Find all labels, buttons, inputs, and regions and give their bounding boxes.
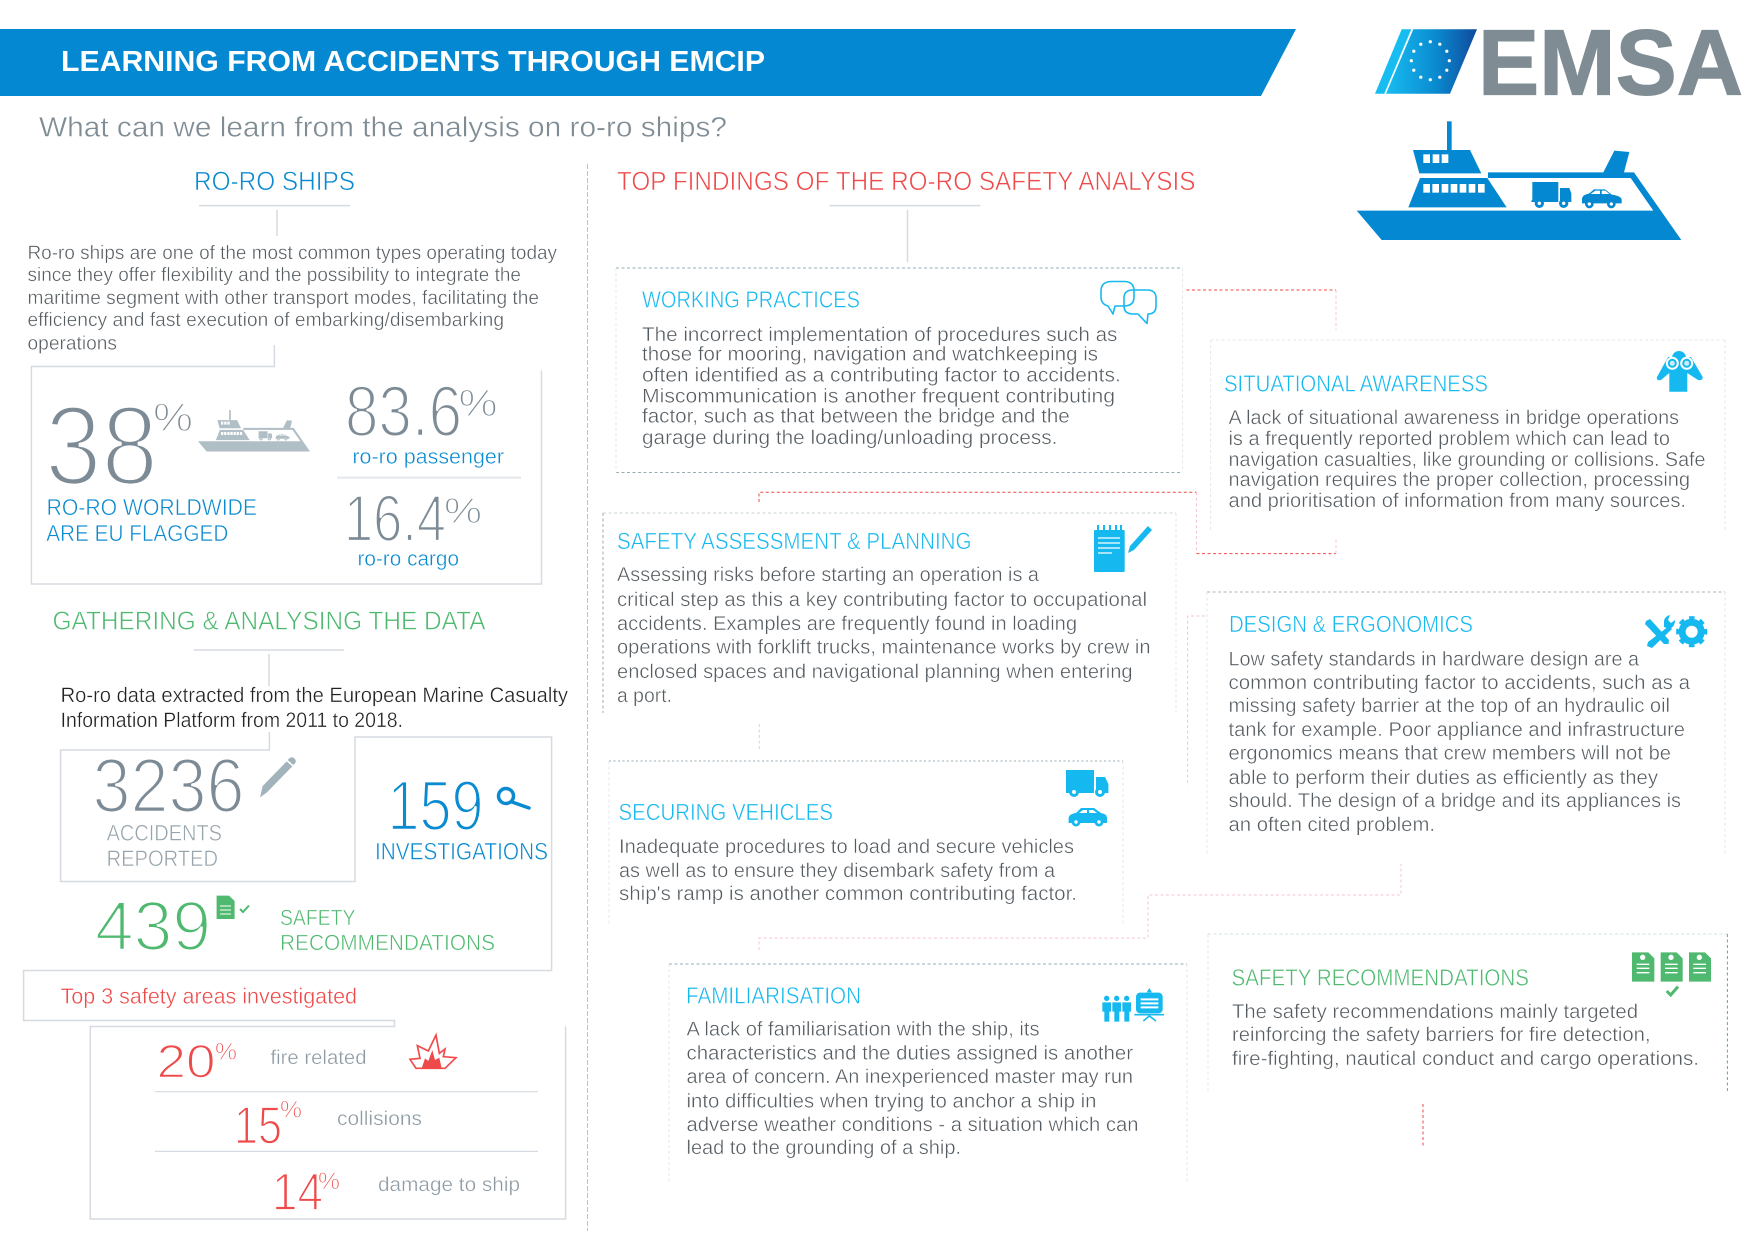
heading: top 3: Top 3 safety areas investigated [61,984,357,1008]
text block: situational awareness: A lack of situational awareness in bridge operations [1228,407,1679,429]
icon: documents with check [1632,952,1711,995]
text block: situational awareness: and prioritisation of information from many sources. [1228,490,1686,512]
text block: ro-ro description: operations [28,332,117,354]
text block: working practices: often identified as a contributing factor to accidents. [642,365,1121,387]
text block: situational awareness: navigation requires the proper collection, processing [1228,469,1690,491]
stat: 439 safety recommendations: 439 [95,887,211,965]
stat: 38% EU flagged: ARE EU FLAGGED [46,520,228,546]
panel: securing vehicles [609,761,1123,924]
stat: 20% fire related [156,1034,366,1088]
text block: familiarisation: characteristics and the duties assigned is another [686,1043,1133,1065]
text block: ro-ro description: since they offer flexibility and the possibility to integrate the [28,264,521,286]
panel: top 3 safety areas [61,984,538,1222]
text block: safety assessment: operations with forklift trucks, maintenance works by crew in [617,637,1150,659]
icon: crew and board [1102,988,1164,1022]
icon: truck [1066,770,1108,797]
text block: safety recommendations: reinforcing the safety barriers for fire detection, [1232,1024,1650,1046]
text block: safety assessment: a port. [617,685,672,707]
text block: working practices: The incorrect implementation of procedures such as [642,324,1117,346]
text block: ro-ro description: maritime segment with other transport modes, facilitating the [28,287,539,309]
text block: safety recommendations: fire-fighting, nautical conduct and cargo operations. [1232,1048,1699,1070]
icon: pencil [260,757,296,797]
text block: familiarisation: into difficulties when trying to anchor a ship in [686,1090,1096,1112]
text block: safety assessment: critical step as this a key contributing factor to occupational [617,589,1147,611]
text block: working practices: factor, such as that between the bridge and the [642,406,1070,428]
panel: safety assessment and planning [603,513,1176,713]
stat: 159 investigations [375,767,548,866]
connector: recommendations tail [1422,1104,1424,1147]
text block: safety assessment: accidents. Examples are frequently found in loading [617,613,1077,635]
text block: familiarisation [686,1019,1138,1159]
title: LEARNING FROM ACCIDENTS THROUGH EMCIP [61,46,765,78]
stat: 439 safety recommendations: RECOMMENDATIONS [280,930,495,955]
text block: design and ergonomics: able to perform their duties as efficiently as they [1228,767,1658,789]
text block: securing vehicles: as well as to ensure they disembark safety from a [619,860,1056,882]
stat: 16.4% ro-ro cargo: % [444,490,482,531]
text block: familiarisation: adverse weather conditions - a situation which can [686,1114,1138,1136]
text block: ro-ro description: efficiency and fast execution of embarking/disembarking [28,309,504,331]
text block: safety assessment [617,564,1150,707]
title banner [0,29,1296,96]
column divider [586,164,588,1231]
heading: gathering: GATHERING & ANALYSING THE DATA [52,606,486,636]
stat: 3236 accidents reported: REPORTED [107,846,218,871]
stat: 83.6% ro-ro passenger: % [458,383,498,425]
stat: 159 investigations: 159 [388,767,484,846]
text block: working practices: Miscommunication is another frequent contributing [642,386,1115,408]
panel: ro-ro ships [28,166,557,584]
connector: safety assessment to situational awareness [759,492,1336,554]
icon: tools and gear [1645,615,1705,648]
stat: 439 safety recommendations: SAFETY [280,905,356,930]
heading: familiarisation: FAMILIARISATION [686,982,861,1008]
text block: design and ergonomics: tank for example. Poor appliance and infrastructure [1228,719,1685,741]
text block: situational awareness: is a frequently reported problem which can lead to [1228,428,1670,450]
stat: 15% collisions: 15 [234,1096,282,1156]
stat: 14% damage to ship: damage to ship [378,1174,520,1196]
text block: situational awareness: navigation casualties, like grounding or collisions. Safe [1228,449,1706,471]
text block: familiarisation: area of concern. An inexperienced master may run [686,1066,1133,1088]
text block: safety assessment: Assessing risks before starting an operation is a [617,564,1040,586]
stat: 20% fire related: fire related [270,1047,366,1069]
stat: 3236 accidents reported: ACCIDENTS [107,821,222,846]
text block: working practices [642,324,1121,449]
heading: situational awareness: SITUATIONAL AWARENESS [1224,370,1488,396]
panel: situational awareness [1211,340,1725,531]
text block: safety recommendations [1232,1001,1699,1070]
text block: securing vehicles [619,836,1077,905]
stat: 38% EU flagged: RO-RO WORLDWIDE [47,494,257,520]
stat: 20% fire related: 20 [156,1034,216,1088]
stat: 83.6% ro-ro passenger: ro-ro passenger [352,445,504,468]
stat: 3236 accidents reported: 3236 [92,743,244,829]
text block: design and ergonomics: an often cited problem. [1228,814,1435,836]
text block: design and ergonomics: Low safety standards in hardware design are a [1228,648,1640,670]
stat: 38% EU flagged: 38 [45,382,158,508]
panel: familiarisation [669,964,1187,1184]
icon: person with binoculars [1657,351,1703,392]
text block: familiarisation: lead to the grounding of a ship. [686,1137,961,1159]
stat: 15% collisions [234,1096,422,1156]
heading: safety assessment: SAFETY ASSESSMENT & PLANNING [617,528,972,554]
subtitle: What can we learn from the analysis on ro-ro ships? [39,112,727,142]
text block: securing vehicles: Inadequate procedures to load and secure vehicles [619,836,1074,858]
stat: 14% damage to ship: % [318,1168,340,1195]
heading: ro-ro ships: RO-RO SHIPS [194,166,355,196]
stat: 14% damage to ship: 14 [272,1163,323,1222]
heading: top findings: TOP FINDINGS OF THE RO-RO SAFETY ANALYSIS [617,166,1195,196]
icon: magnifier [498,788,529,808]
text block: design and ergonomics: ergonomics means that crew members will not be [1228,743,1671,765]
connector: safety assessment to design and ergonomics [1188,616,1205,786]
icon: fire [410,1035,456,1068]
stat: 439 safety recommendations [95,887,495,965]
stat: 15% collisions: % [280,1096,302,1123]
text block: safety assessment: enclosed spaces and navigational planning when entering [617,661,1133,683]
stat: 14% damage to ship [272,1163,520,1222]
text block: data source: Information Platform from 2011 to 2018. [61,709,403,732]
icon: ro-ro ship [1357,121,1681,240]
stat: 3236 accidents reported [92,743,244,871]
connector: securing vehicles to familiarisation and design [759,864,1401,950]
text block: safety recommendations: The safety recommendations mainly targeted [1232,1001,1638,1023]
stat: 20% fire related: % [215,1039,237,1066]
heading: working practices: WORKING PRACTICES [642,287,860,313]
text block: working practices: those for mooring, navigation and watchkeeping is [642,344,1098,366]
stat: 38% EU flagged [45,382,257,546]
text block: working practices: garage during the loading/unloading process. [642,427,1057,449]
text block: familiarisation: A lack of familiarisation with the ship, its [686,1019,1040,1041]
text block: data source: Ro-ro data extracted from the European Marine Casualty [61,684,568,707]
connector: working practices to situational awareness [1186,290,1336,330]
stat: 16.4% ro-ro cargo: ro-ro cargo [358,548,459,570]
text block: design and ergonomics [1228,648,1691,836]
text block: ro-ro description: Ro-ro ships are one of the most common types operating today [28,242,557,264]
panel: gathering and analysing the data [24,606,568,1219]
panel: design and ergonomics [1207,592,1725,855]
stat: 16.4% ro-ro cargo: 16.4 [344,481,446,555]
icon: small ship [198,410,310,452]
stat: 159 investigations: INVESTIGATIONS [375,839,548,866]
text block: design and ergonomics: should. The design of a bridge and its appliances is [1228,790,1681,812]
stat: 15% collisions: collisions [337,1108,422,1130]
icon: notepad and pencil [1094,525,1152,572]
heading: safety recommendations: SAFETY RECOMMENDATIONS [1232,964,1529,990]
stat: 38% EU flagged: % [153,396,193,440]
heading: securing vehicles: SECURING VEHICLES [618,799,833,825]
stat: 83.6% ro-ro passenger: 83.6 [345,372,462,452]
icon: document with check [217,896,249,919]
text block: situational awareness [1228,407,1706,512]
heading: design and ergonomics: DESIGN & ERGONOMICS [1229,611,1473,637]
icon: car [1069,808,1107,826]
panel: safety recommendations [1208,934,1727,1093]
text block: design and ergonomics: missing safety barrier at the top of an hydraulic oil [1228,695,1670,717]
EMSA logo: EMSA [1478,10,1743,114]
icon: speech bubbles [1101,282,1156,324]
text block: securing vehicles: ship's ramp is another common contributing factor. [619,883,1077,905]
connector: safety assessment to securing vehicles [758,724,760,751]
text block: design and ergonomics: common contributing factor to accidents, such as a [1228,672,1691,694]
text block: ro-ro description [28,242,557,354]
panel: working practices [616,268,1182,472]
text block: data source [61,684,568,732]
